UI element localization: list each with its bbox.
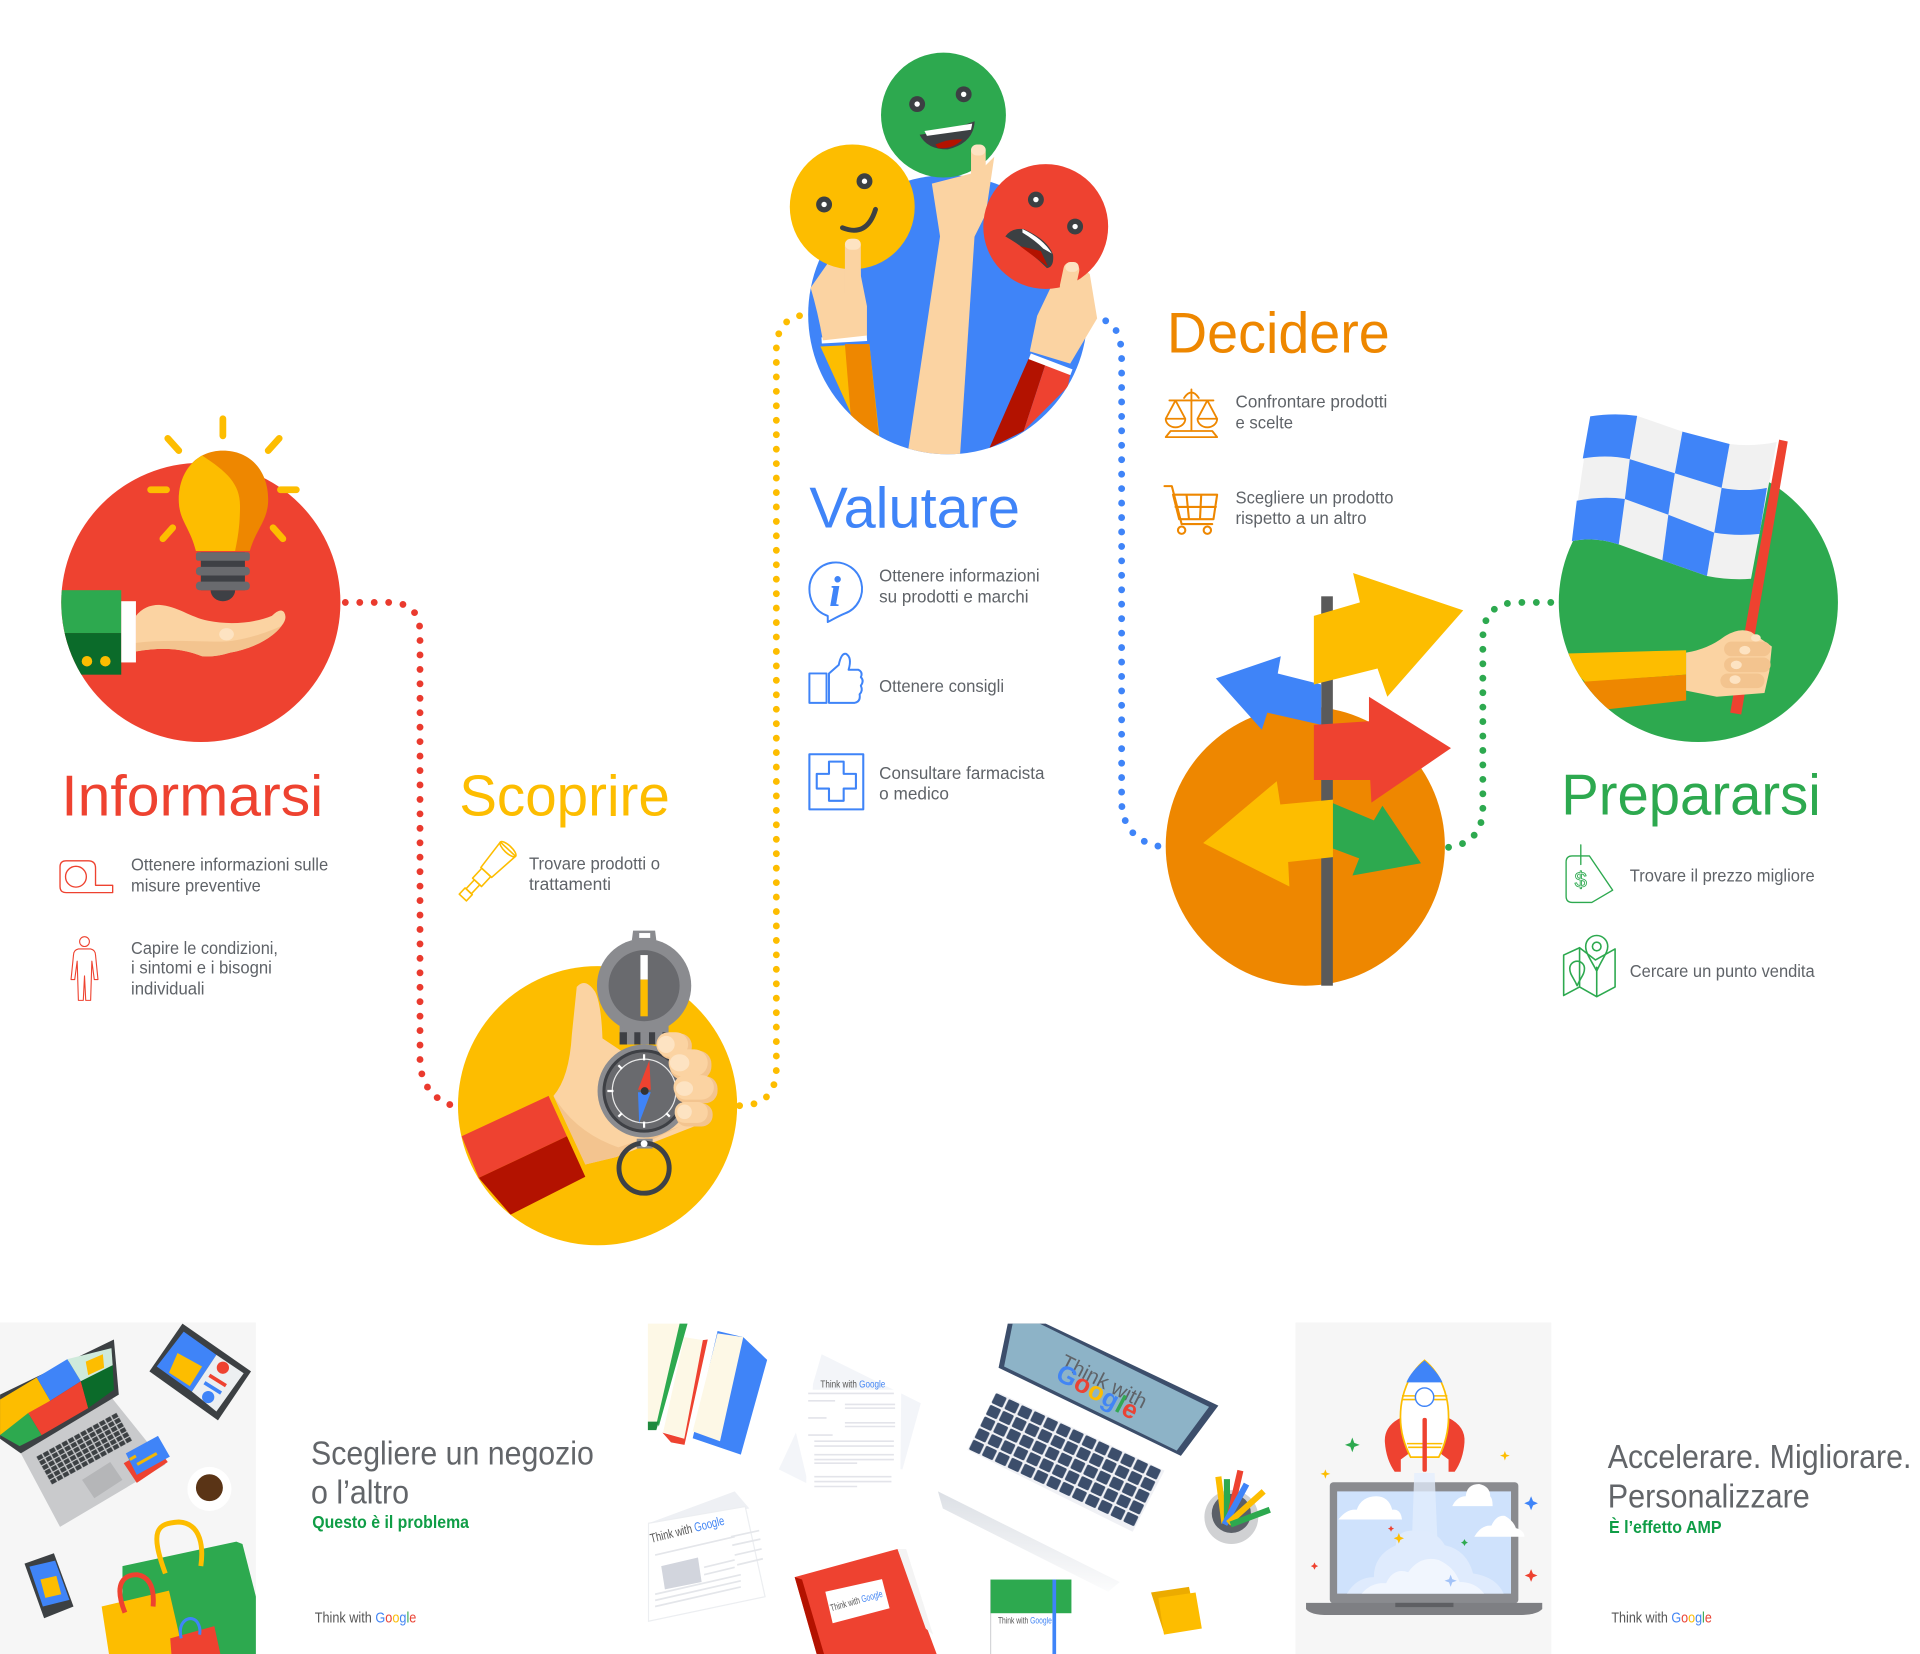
text: scegliere un prodotto: rispetto a un altro: [1236, 508, 1367, 528]
logo: Think with Google: Think with Google: [315, 1610, 416, 1626]
panel: Prepararsi: [1555, 414, 1838, 997]
illustration: office desk scene: [648, 1324, 1270, 1654]
heading: Valutare: Valutare: [809, 477, 1020, 541]
heading: Decidere: Decidere: [1167, 302, 1390, 366]
icon: map with pins: [1564, 935, 1615, 997]
text: condizioni: individuali: [131, 978, 205, 998]
text: prezzo migliore: Trovare il prezzo migliore: [1630, 866, 1815, 886]
icon: info bubble: i: [829, 569, 841, 616]
text: scegliere un prodotto: Scegliere un prodotto: [1236, 487, 1394, 507]
panel: Informarsi: [55, 419, 340, 1000]
panel: Decidere: [1164, 302, 1463, 986]
text: punto vendita: Cercare un punto vendita: [1630, 961, 1815, 981]
icon: price tag: $: [1575, 868, 1587, 893]
text: condizioni: Capire le condizioni,: [131, 938, 278, 958]
text: misure preventive: Ottenere informazioni sulle: [131, 855, 328, 875]
caption: Scegliere un negozio: Questo è il problema: [312, 1512, 469, 1532]
illustration: hand holding compass: [458, 931, 737, 1245]
laptop: [938, 1324, 1218, 1592]
illustration: rocket launching from laptop: [1296, 1322, 1551, 1654]
dotted connector: yellow: [740, 315, 808, 1106]
illustration: shopping desk scene: [0, 1322, 256, 1654]
sticky notes: [1151, 1587, 1202, 1635]
heading: Prepararsi: Prepararsi: [1561, 763, 1821, 827]
caption: Scegliere un negozio: Scegliere un negozio: [311, 1435, 594, 1472]
text: misure preventive: misure preventive: [131, 875, 261, 895]
text: confrontare prodotti: e scelte: [1236, 413, 1293, 433]
icon: tape measure: [60, 861, 113, 893]
text: consultare farmacista: o medico: [879, 784, 949, 804]
icon: info bubble: [809, 562, 862, 622]
sparkles: [1311, 1438, 1538, 1587]
red folder: Think with Google: [829, 1589, 884, 1614]
text: ottenere informazioni: Ottenere informazioni: [879, 566, 1040, 586]
dotted connector: blue: [1106, 321, 1166, 847]
panel: Scoprire: [455, 764, 737, 1245]
icon: thumbs up: [809, 654, 863, 703]
text: trovare prodotti: Trovare prodotti o: [529, 853, 660, 873]
dotted connector: green: [1449, 602, 1558, 847]
caption: Accelerare: [1608, 1439, 1911, 1537]
icon: telescope: [455, 839, 518, 905]
rocket exhaust: [1347, 1473, 1504, 1594]
icon: human figure: [71, 937, 98, 1000]
caption: Scegliere un negozio: [311, 1435, 594, 1532]
documents: Think with Google: [820, 1379, 885, 1390]
dotted connector: red: [345, 602, 457, 1107]
newspaper: [648, 1491, 765, 1621]
text: confrontare prodotti: Confrontare prodotti: [1236, 392, 1387, 412]
red folder: [795, 1549, 937, 1654]
illustration: hand holding checkered flag: [1555, 414, 1838, 742]
text: condizioni: i sintomi e i bisogni: [131, 957, 272, 977]
pencil cup: [1204, 1471, 1270, 1544]
rocket: [1385, 1360, 1465, 1472]
illustration: signpost arrows: [1166, 573, 1463, 986]
logo: Think with Google right: Think with Google: [1611, 1610, 1712, 1626]
icon: price tag: [1566, 845, 1613, 902]
text: ottenere informazioni: su prodotti e marchi: [879, 586, 1029, 606]
caption: Scegliere un negozio: o l’altro: [311, 1475, 409, 1512]
illustration: hand and light bulb: [55, 419, 340, 742]
caption: Accelerare: Personalizzare: [1608, 1478, 1810, 1515]
icon: scales: [1166, 389, 1217, 437]
illustration: hands holding emoji faces: [790, 53, 1108, 455]
text: trovare prodotti: trattamenti: [529, 874, 611, 894]
notebook: [991, 1580, 1071, 1654]
documents: [779, 1354, 920, 1488]
heading: Informarsi: Informarsi: [61, 764, 323, 828]
icon: medical cross: [809, 754, 863, 809]
heading: Scoprire: Scoprire: [459, 764, 670, 828]
newspaper: Think with Google: [649, 1513, 726, 1546]
caption: Accelerare: È l’effetto AMP: [1609, 1516, 1722, 1537]
icon: shopping cart: [1164, 486, 1217, 534]
laptop: [1306, 1482, 1542, 1615]
clouds: [1338, 1484, 1524, 1537]
text: ottenere consigli: Ottenere consigli: [879, 676, 1004, 696]
panel: Valutare: [790, 53, 1108, 809]
books: [648, 1324, 767, 1455]
notebook: Think with Google: [998, 1616, 1052, 1626]
laptop: Think with: [1057, 1350, 1151, 1413]
laptop: Google: [1051, 1359, 1143, 1426]
text: consultare farmacista: Consultare farmacista: [879, 763, 1045, 783]
